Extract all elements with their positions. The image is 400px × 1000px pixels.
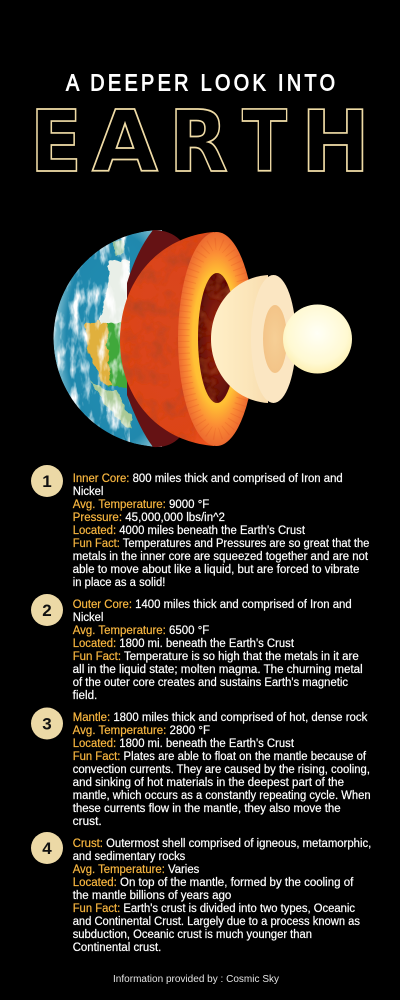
badge 4 (31, 832, 63, 864)
outer core text: Nickel (73, 612, 103, 624)
title: A Deeper Look Into: A DEEPER LOOK INTO (66, 70, 335, 96)
crust text: and Continental Crust. Largely due to a process known as (73, 916, 360, 928)
panel: outer core (31, 594, 363, 702)
inner core text: Located: 4000 miles beneath the Earth's Crust (73, 525, 306, 537)
crust text: Located: On top of the mantle, formed by the cooling of (73, 877, 354, 889)
badge 2 (31, 594, 63, 626)
outer core cut face (251, 275, 296, 403)
title: Earth outlined letters: H (301, 93, 370, 192)
outer core text: Fun Fact: Temperature is so high that the metals in it are (73, 651, 359, 663)
crust text: Continental crust. (73, 942, 161, 954)
mantle text: convection currents. They are caused by the rising, cooling, (73, 764, 370, 776)
mantle text: mantle, which occurs as a constantly repeating cycle. When (73, 790, 371, 802)
title: Earth outlined letters (30, 93, 370, 192)
panel: crust (31, 832, 371, 954)
crust text: Fun Fact: Earth's crust is divided into two types, Oceanic (73, 903, 355, 915)
outer core text: Located: 1800 mi. beneath the Earth's Crust (73, 638, 295, 650)
title: Earth outlined letters: T (242, 93, 287, 192)
mantle text: crust. (73, 816, 102, 828)
inner core text: metals in the inner core are squeezed together and are not (73, 551, 369, 563)
crust text: Avg. Temperature: Varies (73, 864, 200, 876)
inner core text: able to move about like a liquid, but are forced to vibrate (73, 564, 359, 576)
badge 1: 1 (42, 472, 52, 491)
inner core text: Fun Fact: Temperatures and Pressures are so great that the (73, 538, 369, 550)
outer core text: Avg. Temperature: 6500 °F (73, 625, 209, 637)
inner core text (73, 473, 369, 589)
mantle text: Located: 1800 mi. beneath the Earth's Crust (73, 738, 295, 750)
inner core cavity (263, 305, 287, 373)
mantle hemisphere (120, 232, 214, 446)
outer core text: all in the liquid state; molten magma. The churning metal (73, 664, 363, 676)
outer core text (73, 599, 363, 702)
badge 3: 3 (42, 714, 52, 734)
title: Earth outlined letters: A (92, 93, 158, 192)
outer core text: of the outer core creates and sustains Earth's magnetic (73, 677, 348, 689)
mantle text: Avg. Temperature: 2800 °F (73, 725, 210, 737)
mantle cut face (178, 232, 255, 446)
mantle text: and sinking of hot materials in the deepest part of the (73, 777, 344, 789)
radial streaks on mantle face (184, 244, 250, 434)
title: Earth outlined letters: E (30, 93, 82, 192)
mantle text (73, 712, 371, 828)
mantle text: Mantle: 1800 miles thick and comprised of hot, dense rock (73, 712, 368, 724)
inner core sphere (283, 304, 352, 374)
illustration: earth layers cutaway (50, 228, 352, 448)
mantle text: these currents flow in the mantle, they also move the (73, 803, 341, 815)
badge 4: 4 (42, 839, 52, 858)
outer core text: field. (73, 690, 97, 702)
badge 1 (31, 465, 63, 497)
footer credit: Information provided by : Cosmic Sky (113, 974, 279, 985)
crust inner shell (127, 230, 180, 447)
outer core hemisphere (211, 275, 268, 403)
crust text: and sedimentary rocks (73, 851, 186, 863)
outer core text: Outer Core: 1400 miles thick and comprised of Iron and (73, 599, 352, 611)
crust globe (50, 228, 162, 448)
crust text: Crust: Outermost shell comprised of igneous, metamorphic, (73, 838, 371, 850)
badge 2: 2 (42, 601, 52, 620)
crust text (73, 838, 371, 954)
title: Earth outlined letters: R (169, 93, 228, 192)
inner core text: Nickel (73, 486, 103, 498)
inner core text: Avg. Temperature: 9000 °F (73, 499, 209, 511)
mantle text: Fun Fact: Plates are able to float on the mantle because of (73, 751, 367, 763)
outer core cavity (198, 273, 236, 403)
inner core text: in place as a solid! (73, 577, 165, 589)
inner core text: Pressure: 45,000,000 lbs/in^2 (73, 512, 225, 524)
crust text: subduction, Oceanic crust is much younger than (73, 929, 312, 941)
panel: inner core (31, 465, 369, 589)
badge 3 (31, 708, 63, 740)
crust text: the mantle billions of years ago (73, 890, 231, 902)
panel: mantle (31, 708, 371, 828)
inner core text: Inner Core: 800 miles thick and comprised of Iron and (73, 473, 343, 485)
